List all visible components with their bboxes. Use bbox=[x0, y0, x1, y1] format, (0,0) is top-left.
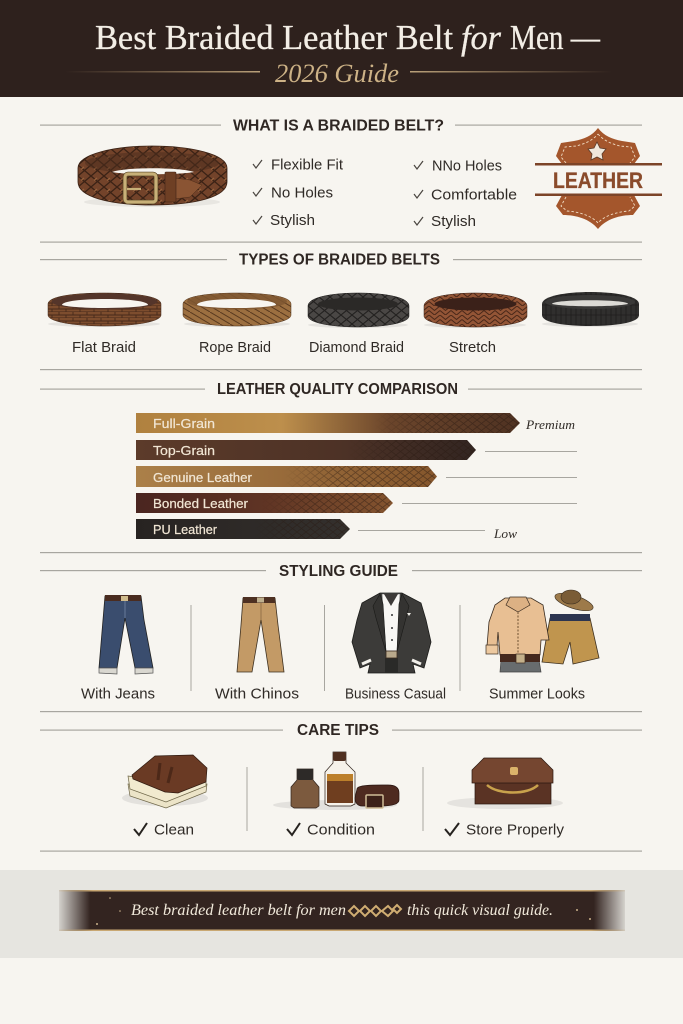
badge: leather bbox=[535, 128, 662, 229]
shirt and trousers bbox=[500, 660, 541, 672]
bar: full-grain bbox=[136, 413, 575, 433]
list: belt features left bbox=[253, 156, 344, 229]
belt type: diamond braid bbox=[308, 293, 409, 356]
header banner bbox=[0, 0, 683, 97]
tier label: premium: Premium bbox=[525, 418, 575, 432]
belt type: rope braid bbox=[183, 293, 291, 356]
bar: top-grain: Top-Grain bbox=[153, 444, 215, 458]
feature: flexible fit: Flexible Fit bbox=[271, 156, 344, 174]
decorative diamonds bbox=[349, 905, 401, 916]
sparkles bbox=[96, 897, 591, 925]
badge: leather: LEATHER bbox=[553, 168, 643, 193]
bar: pu leather: PU Leather bbox=[153, 523, 217, 537]
hat bbox=[553, 590, 595, 614]
heading: what is a braided belt: WHAT IS A BRAIDED BELT? bbox=[233, 118, 444, 134]
belt type: stretch bbox=[424, 293, 527, 356]
feature: no holes: NNo Holes bbox=[432, 158, 502, 174]
label: summer looks: Summer Looks bbox=[489, 686, 585, 702]
label: Flat Braid bbox=[72, 339, 136, 356]
oil bottle bbox=[325, 752, 355, 806]
label: with jeans: With Jeans bbox=[81, 686, 155, 702]
bar: pu leather bbox=[136, 519, 518, 541]
icon: braided belt with buckle bbox=[78, 146, 227, 207]
belt type: flat braid bbox=[48, 293, 161, 356]
icon: summer outfit bbox=[486, 590, 599, 672]
label: with chinos: With Chinos bbox=[215, 686, 299, 702]
title: for bbox=[461, 18, 501, 57]
footer band bbox=[0, 870, 683, 958]
label: clean: Clean bbox=[154, 822, 194, 838]
chart: leather quality arrows bbox=[136, 413, 577, 541]
icon: condition bottles and belt bbox=[273, 752, 399, 810]
heading: care tips: CARE TIPS bbox=[297, 722, 379, 739]
list: belt features right bbox=[414, 158, 517, 230]
title: Men — bbox=[510, 18, 601, 57]
bar: genuine leather bbox=[136, 466, 577, 487]
bar: genuine leather: Genuine Leather bbox=[153, 471, 252, 485]
vertical dividers: care bbox=[246, 767, 424, 831]
feature: no holes: No Holes bbox=[271, 184, 333, 202]
title: Best Braided Leather Belt bbox=[95, 18, 453, 57]
icon: cleaning cloths bbox=[122, 755, 208, 808]
belt tip and keeper bbox=[165, 172, 202, 202]
heading: types of braided belts: TYPES OF BRAIDED BELTS bbox=[239, 252, 440, 268]
heading: styling guide: STYLING GUIDE bbox=[279, 563, 398, 580]
label: Stretch bbox=[449, 339, 496, 356]
shorts bbox=[542, 618, 599, 664]
label: Rope Braid bbox=[199, 339, 271, 356]
bar: top-grain bbox=[136, 440, 577, 460]
belt type: black elastic, unlabelled bbox=[542, 292, 639, 327]
footer ribbon: Best braided leather belt for men bbox=[131, 902, 346, 919]
buckle bbox=[125, 174, 156, 202]
icon: blazer bbox=[352, 593, 431, 673]
vertical dividers: styling bbox=[190, 605, 460, 691]
feature: comfortable: Comfortable bbox=[431, 186, 517, 204]
label: clean bbox=[134, 822, 194, 838]
small bottle bbox=[291, 769, 319, 808]
icon: chinos bbox=[237, 597, 284, 672]
label: store properly: Store Properly bbox=[466, 822, 565, 838]
bar: bonded leather: Bonded Leather bbox=[153, 497, 248, 511]
footer ribbon bbox=[59, 890, 625, 931]
label: condition: Condition bbox=[307, 822, 375, 838]
footer ribbon: this quick visual guide. bbox=[407, 902, 553, 919]
bar: full-grain: Full-Grain bbox=[153, 417, 215, 431]
icon: storage box bbox=[447, 758, 563, 809]
label: Diamond Braid bbox=[309, 339, 404, 356]
feature: stylish: Stylish bbox=[431, 213, 476, 230]
rolled belt bbox=[355, 785, 399, 806]
icon: star bbox=[588, 142, 606, 160]
feature: stylish: Stylish bbox=[270, 212, 315, 229]
heading: leather quality comparison: LEATHER QUALITY COMPARISON bbox=[217, 381, 458, 398]
bar: bonded leather bbox=[136, 493, 577, 513]
label: business casual: Business Casual bbox=[345, 686, 446, 702]
subtitle: 2026 Guide: 2026 Guide bbox=[275, 59, 399, 88]
tier label: low: Low bbox=[493, 527, 518, 541]
icon: jeans bbox=[99, 595, 153, 674]
